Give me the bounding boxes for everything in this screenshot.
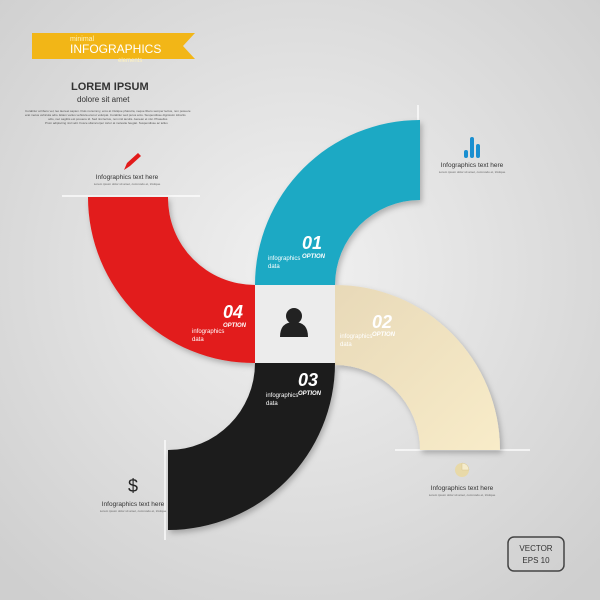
- arm 04 red: [88, 197, 255, 363]
- icon: dollar + text: [100, 476, 167, 513]
- icon: dollar + text: Lorem ipsum dolor sit amet, commodo et, tristique: [100, 509, 167, 513]
- arm 02 beige: [335, 285, 500, 450]
- heading: erat metus vehicula odio. Etiam varius vehicula erat ut volutpat. Curabitur sed purus arcu. Suspendisse dignissim lobortis: [25, 113, 186, 117]
- arm 02 beige: OPTION: [372, 332, 396, 338]
- heading: Proin adipiscing nisl velit. Fusce ullamcorper tortor at molestie feugiat. Suspendisse ac tellus: [45, 121, 168, 125]
- arm 01 blue: infographics: [268, 256, 300, 262]
- arm 02 beige: data: [340, 342, 352, 348]
- arm 02 beige: infographics: [340, 334, 372, 340]
- heading: dolore sit amet: [77, 95, 130, 104]
- arm 02 beige: 02: [372, 312, 392, 332]
- arm 03 black: infographics: [266, 393, 298, 399]
- icon: bar chart + text: Lorem ipsum dolor sit amet, commodo et, tristique: [439, 170, 506, 174]
- arm 03 black: data: [266, 401, 278, 407]
- arm 01 blue: OPTION: [302, 254, 326, 260]
- arm 04 red: 04: [223, 302, 243, 322]
- icon: pie + text: Lorem ipsum dolor sit amet, commodo et, tristique: [429, 493, 496, 497]
- arm 04 red: data: [192, 337, 204, 343]
- icon: bar chart + text: Infographics text here: [441, 162, 504, 169]
- arm 04 red: OPTION: [223, 323, 247, 329]
- badge: vector eps 10: EPS 10: [522, 556, 550, 565]
- arm 01 blue: data: [268, 264, 280, 270]
- icon: pencil + text: [94, 153, 161, 186]
- badge: vector eps 10: VECTOR: [519, 544, 553, 553]
- slits: [62, 105, 530, 540]
- heading: odio, nec sagittis est posuere id. Sed nisi lectus, non nisl iaculis. Aenean et nisi. Phasellus: [48, 117, 168, 121]
- banner ribbon: [32, 33, 195, 64]
- banner ribbon: elements: [118, 58, 142, 64]
- arm 03 black: 03: [298, 370, 318, 390]
- icon: bar chart + text: [439, 137, 506, 174]
- icon: pencil + text: Infographics text here: [96, 174, 159, 181]
- icon: pie + text: [429, 463, 496, 497]
- arm 04 red: infographics: [192, 329, 224, 335]
- banner ribbon: INFOGRAPHICS: [70, 42, 161, 56]
- arm 03 black: OPTION: [298, 391, 322, 397]
- heading: Curabitur at libero vel, leo laoreet sapien. Duis nonummy, eros at tristique pharetra, neque libero semper lectus, non posuere: [25, 109, 191, 113]
- banner ribbon: minimal: [70, 36, 95, 43]
- center square with person icon: [255, 285, 335, 363]
- icon: pencil + text: Lorem ipsum dolor sit amet, commodo et, tristique: [94, 182, 161, 186]
- badge: vector eps 10: [508, 537, 564, 571]
- heading: LOREM IPSUM: [71, 81, 149, 93]
- icon: pie + text: Infographics text here: [431, 485, 494, 492]
- arm 01 blue: 01: [302, 233, 322, 253]
- arm 01 blue: [255, 120, 420, 285]
- icon: dollar + text: $: [128, 476, 138, 496]
- icon: dollar + text: Infographics text here: [102, 501, 165, 508]
- arm 03 black: [168, 363, 335, 530]
- heading: [25, 81, 191, 125]
